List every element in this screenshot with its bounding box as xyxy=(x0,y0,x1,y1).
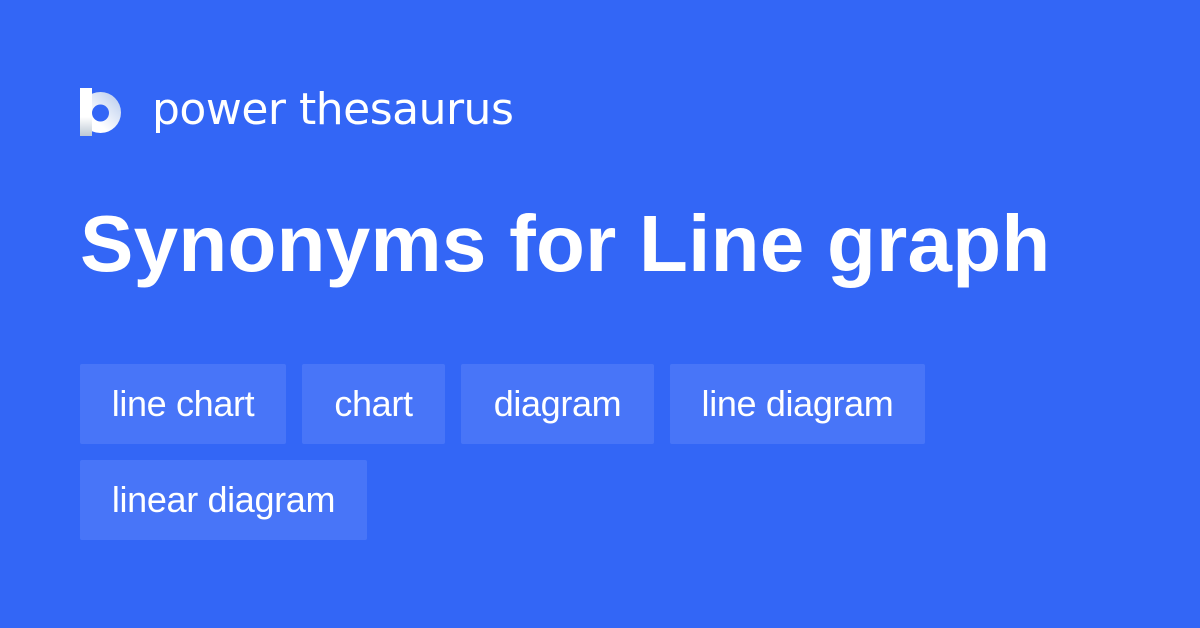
tag: line diagram: line diagram xyxy=(702,383,893,424)
tag: line diagram xyxy=(670,364,925,444)
tag: chart xyxy=(302,364,445,444)
icon: power thesaurus logo xyxy=(80,88,121,136)
brand name: power thesaurus xyxy=(152,84,513,135)
tag: linear diagram: linear diagram xyxy=(112,479,335,520)
tag: diagram: diagram xyxy=(494,383,621,424)
title: Synonyms for Line graph xyxy=(80,199,1051,288)
tag: line chart xyxy=(80,364,286,444)
tag: linear diagram xyxy=(80,460,367,540)
tag: line chart: line chart xyxy=(112,383,254,424)
tag: diagram xyxy=(461,364,654,444)
tag: chart: chart xyxy=(334,383,413,424)
